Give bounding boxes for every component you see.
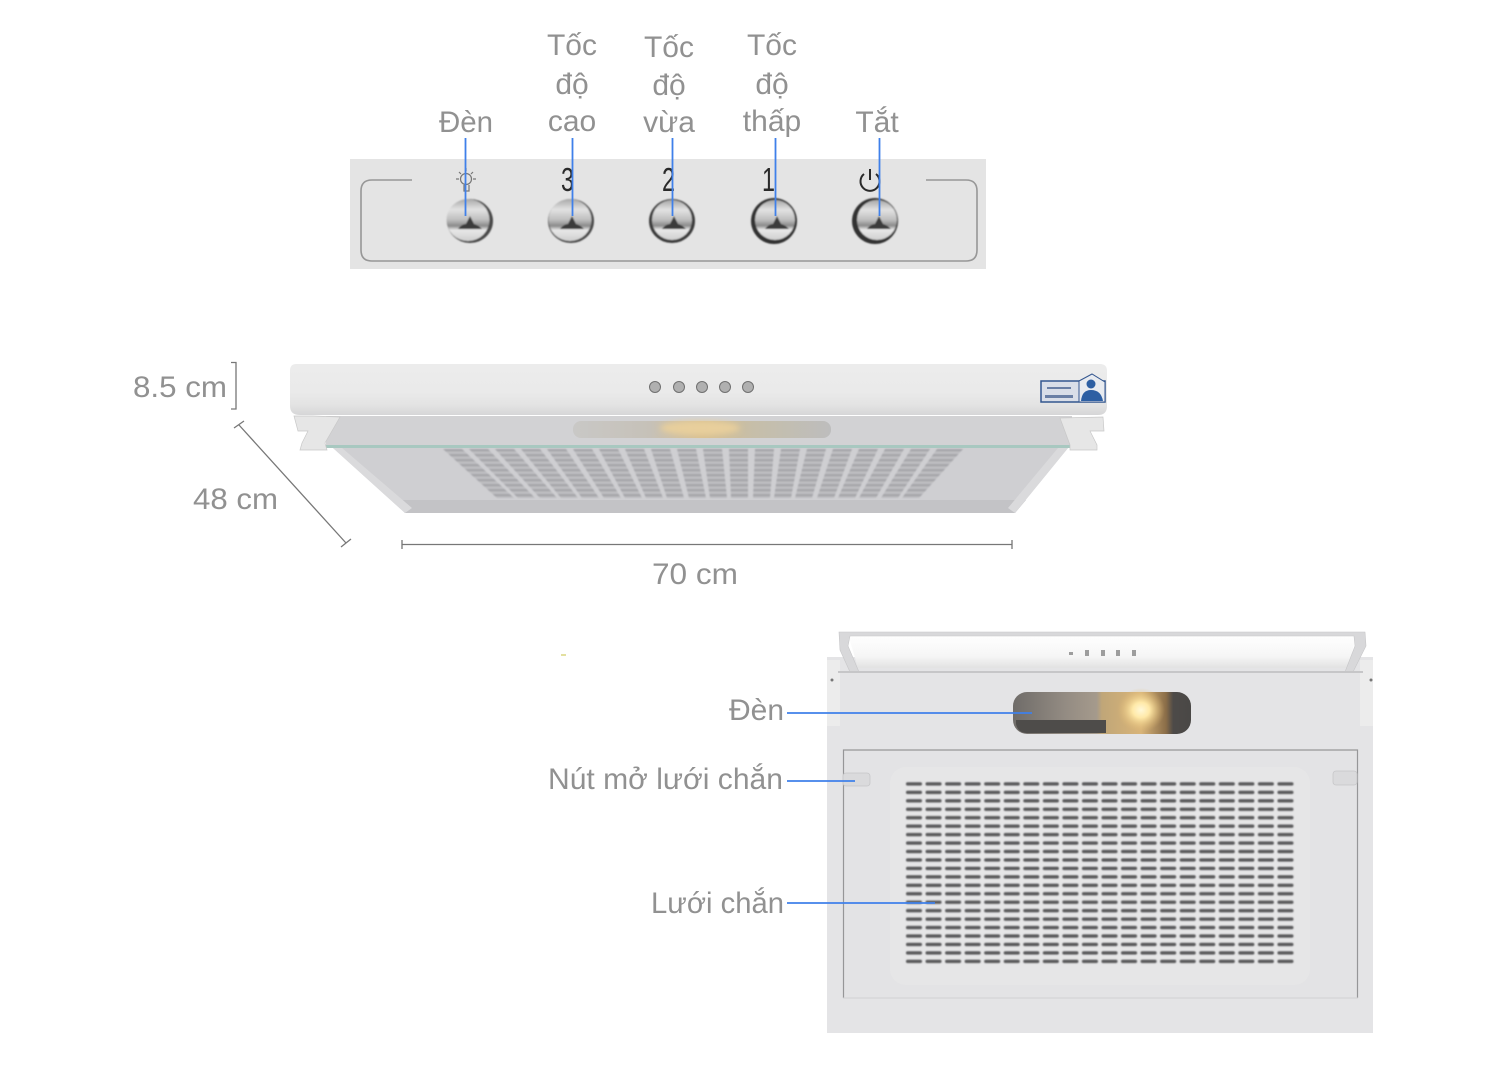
label: lamp: Đèn (729, 694, 784, 727)
knob: low speed (751, 198, 797, 244)
underside left edge (333, 448, 412, 513)
leader line: lamp (787, 712, 1032, 714)
dimension: depth line (234, 421, 351, 547)
front view of hood (290, 364, 1107, 513)
knob: light (446, 199, 493, 243)
knob: high speed (548, 199, 594, 243)
panel plate (350, 159, 986, 269)
label: low speed: độ (755, 68, 789, 101)
filter frame (844, 750, 1358, 998)
knob: medium speed (649, 199, 695, 243)
small knobs (650, 382, 754, 392)
underside body (333, 448, 1068, 513)
label: high speed: cao (548, 105, 596, 138)
right clip (1060, 417, 1104, 450)
lamp window (1013, 688, 1191, 734)
label: off: Tắt (855, 106, 899, 139)
speck (561, 654, 566, 656)
panel: control panel with knobs (350, 159, 986, 269)
knob: off (852, 198, 898, 244)
light glow (660, 421, 740, 435)
body (827, 657, 1373, 1033)
label: medium speed: độ (652, 69, 686, 102)
label: filter release button: Nút mở lưới chắn (548, 763, 783, 796)
panel trim outline (361, 180, 977, 261)
leader line: filter mesh (787, 902, 935, 904)
label: medium speed: vừa (643, 106, 695, 139)
speed number 3: 3 (561, 161, 574, 198)
side screws (830, 678, 1372, 682)
light slot (573, 421, 831, 438)
dimension label: depth: 48 cm (193, 483, 278, 516)
right release tab (1333, 771, 1357, 785)
glass visor (326, 416, 1072, 446)
icon: power symbol (860, 169, 880, 191)
underside front strip (394, 500, 1026, 513)
underside view of hood (827, 632, 1373, 1033)
leader line: release button (787, 780, 855, 782)
lamp bulb glow (1117, 688, 1165, 732)
hood front face (290, 364, 1107, 415)
glass edge (326, 445, 1070, 448)
lamp dark band (1016, 720, 1106, 733)
visor frame (839, 632, 1366, 672)
visor buttons (1069, 650, 1136, 656)
speed number 2: 2 (662, 161, 675, 198)
filter mesh holes (906, 781, 1297, 967)
dimension label: height: 8.5 cm (133, 371, 227, 404)
filter inner plate (890, 767, 1310, 985)
speed number 1: 1 (762, 161, 775, 198)
label: filter mesh: Lưới chắn (651, 887, 784, 920)
louvred grille (443, 449, 963, 498)
visor lower edge (838, 671, 1363, 673)
label: low speed: Tốc (747, 29, 797, 62)
label: medium speed: Tốc (644, 31, 694, 64)
dimension: width line (402, 540, 1012, 549)
left side rail (827, 660, 840, 726)
left release tab (843, 773, 870, 786)
dimension label: width: 70 cm (652, 558, 738, 591)
label: light button: Đèn (439, 106, 493, 139)
top visor glass (848, 634, 1356, 668)
leader lines: knobs (466, 138, 880, 216)
left clip (294, 416, 340, 450)
label: low speed: thấp (743, 105, 801, 138)
dimension: height bracket (231, 362, 236, 409)
underside right edge (1008, 448, 1068, 513)
icon: service sticker (1041, 374, 1105, 402)
right side rail (1360, 660, 1373, 726)
label: high speed: Tốc (547, 29, 597, 62)
icon: light bulb symbol (456, 168, 476, 191)
filter bottom edge (843, 997, 1358, 999)
label: high speed: độ (555, 68, 589, 101)
